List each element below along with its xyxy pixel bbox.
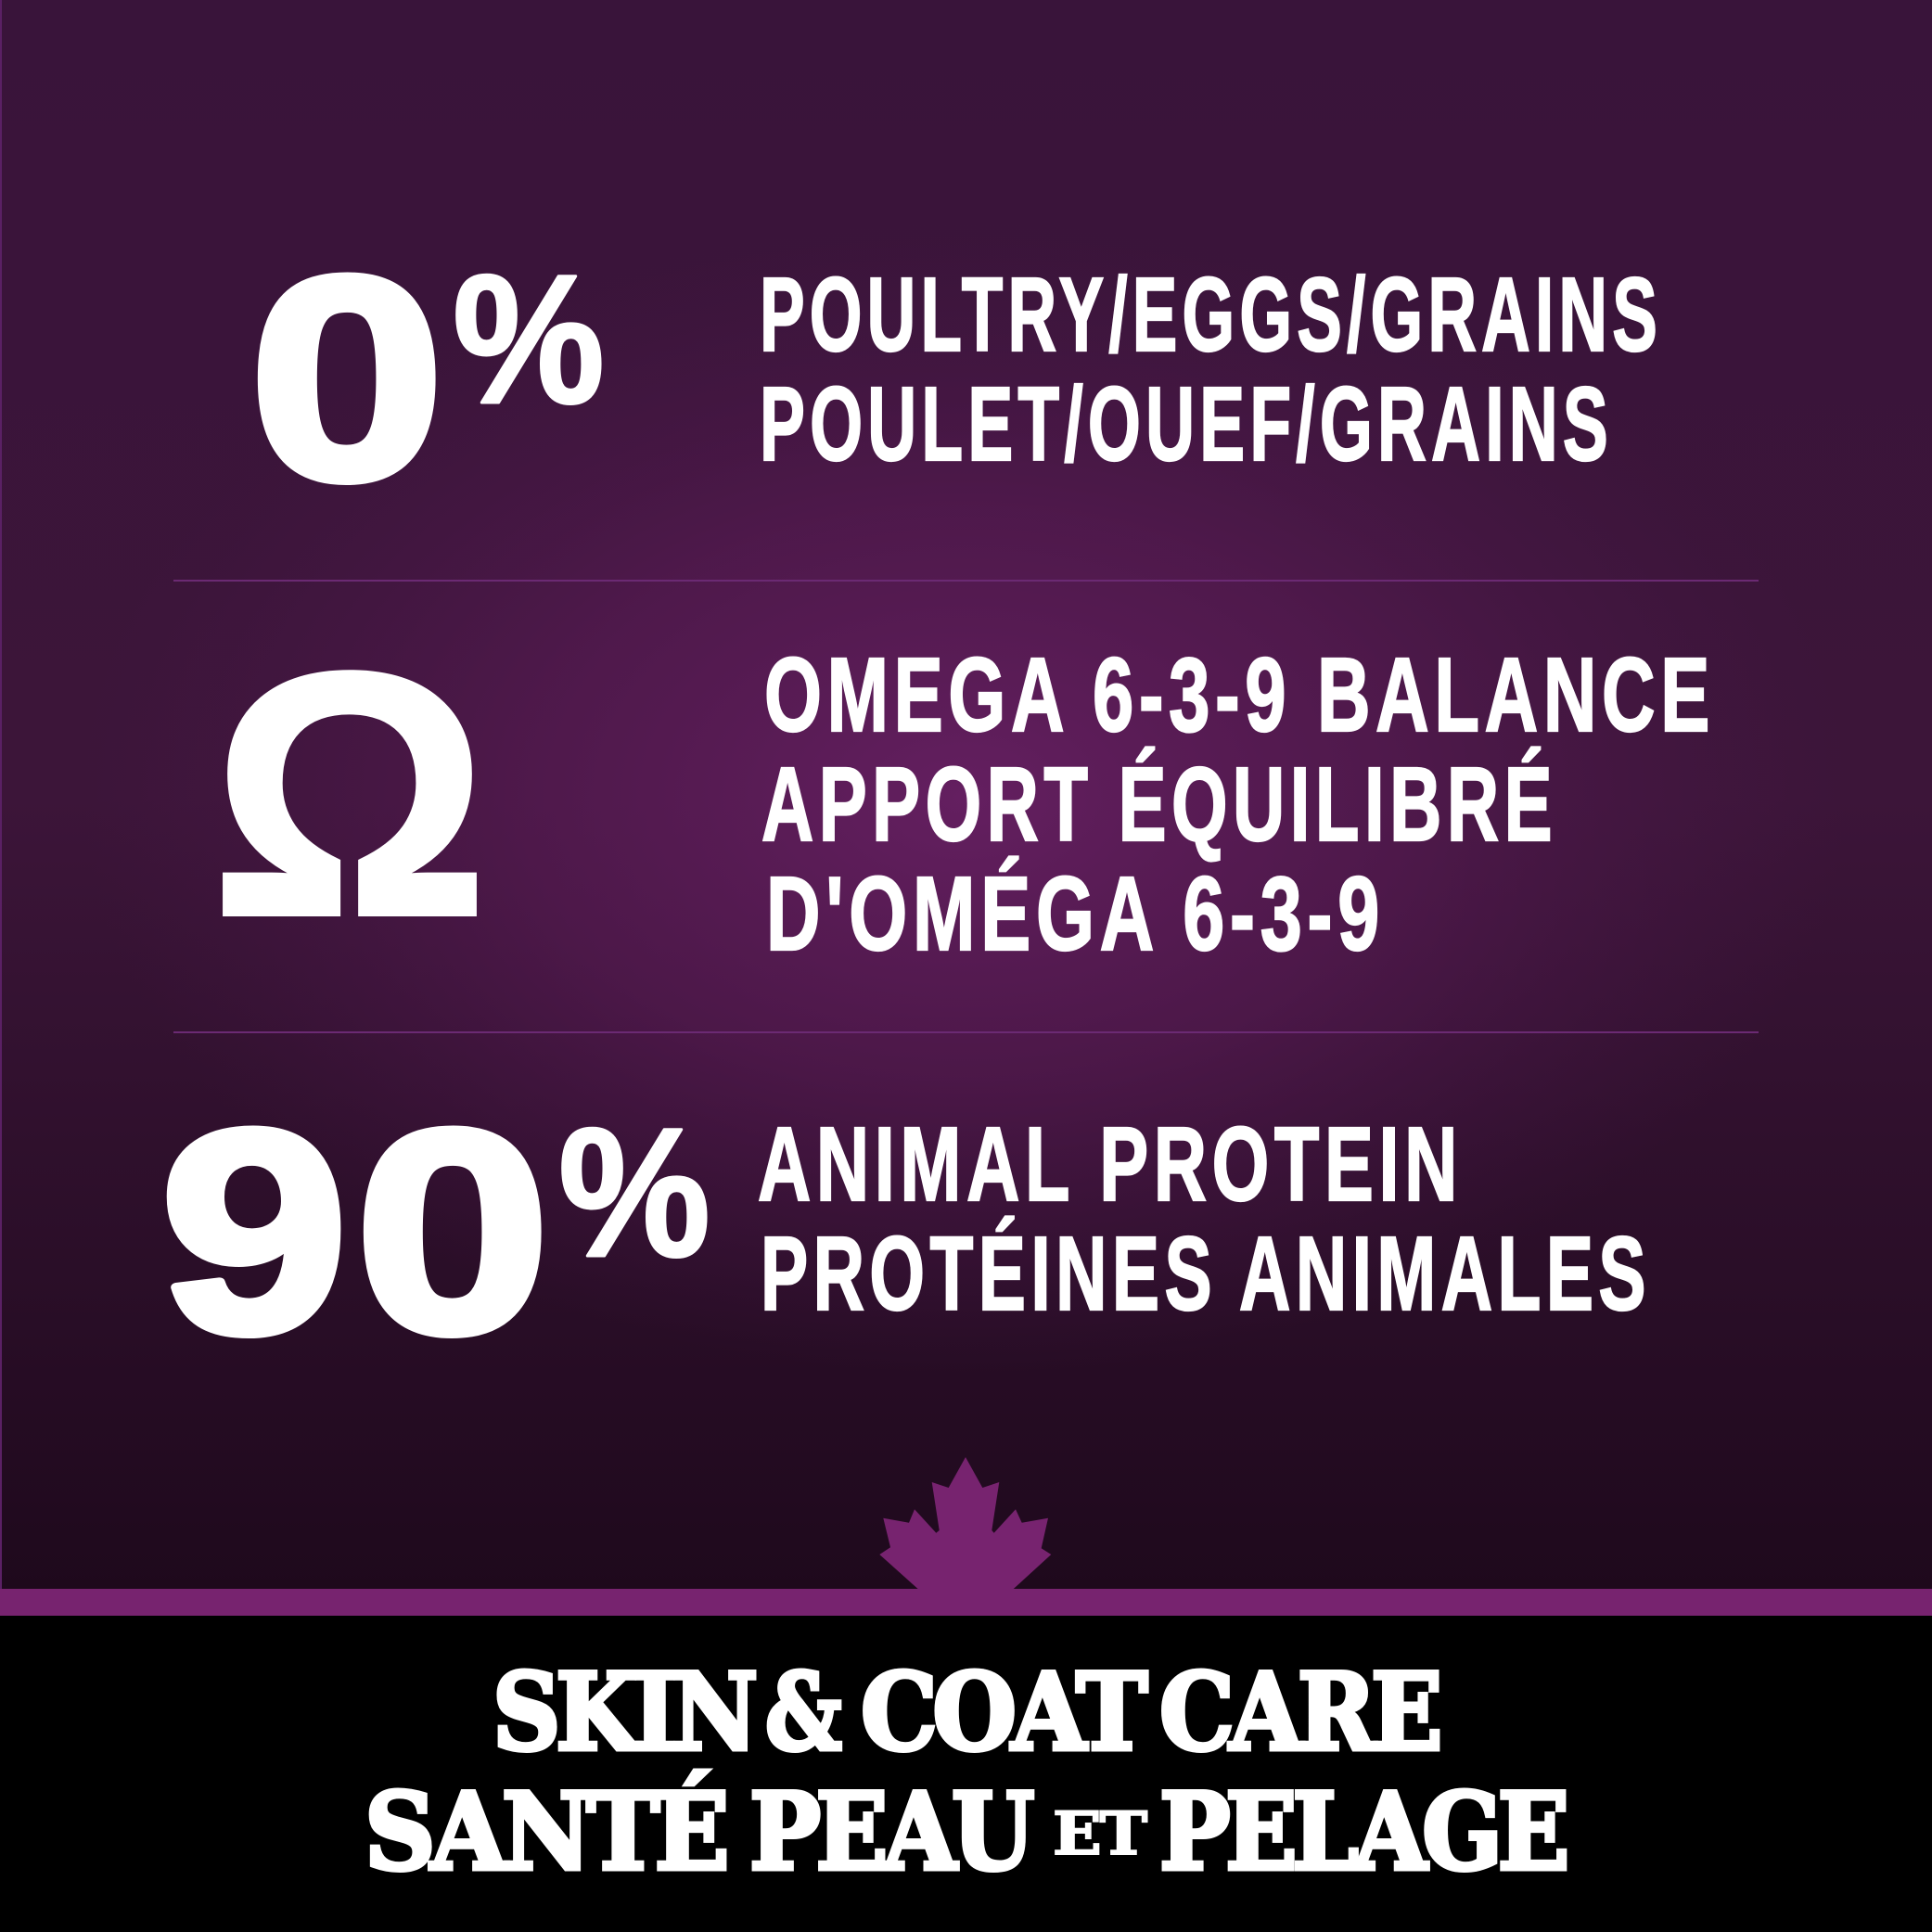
row: ninety percent [160, 1070, 1651, 1392]
footer title french: PEAU [749, 1770, 1032, 1894]
footer title english: & [765, 1650, 840, 1774]
footer title english [493, 1650, 1439, 1774]
big number 90%: % [558, 1090, 710, 1295]
footer title french [365, 1770, 1566, 1894]
big number 90%: 9 [160, 1070, 348, 1392]
text: animal protein: ANIMAL PROTEIN [758, 1106, 1463, 1222]
text: omega balance: APPORT ÉQUILIBRÉ [761, 746, 1557, 863]
footer title english: CARE [1159, 1650, 1439, 1774]
big number 90%: 0 [355, 1070, 550, 1392]
text: animal protein [758, 1106, 1651, 1332]
footer title french: PELAGE [1159, 1770, 1566, 1894]
text: omega balance: D'OMÉGA 6-3-9 [766, 855, 1385, 972]
footer title french: SANTÉ [365, 1770, 725, 1894]
footer panel [0, 1616, 1932, 1932]
big number 0% [249, 217, 605, 539]
footer title english: COAT [861, 1650, 1147, 1774]
footer title english: SKIN [493, 1650, 755, 1774]
text: omega balance [761, 636, 1715, 972]
big number 0%: % [453, 237, 605, 441]
icon: omega symbol: Ω [211, 601, 488, 987]
text: poultry eggs grains [760, 256, 1662, 482]
row: zero percent [249, 217, 1662, 539]
icon: maple leaf [879, 1457, 1051, 1590]
row: omega balance [211, 601, 1715, 987]
big number 0%: 0 [249, 217, 444, 539]
purple band [0, 1589, 1932, 1616]
big number 90% [160, 1070, 710, 1392]
footer title french: ET [1053, 1799, 1146, 1869]
